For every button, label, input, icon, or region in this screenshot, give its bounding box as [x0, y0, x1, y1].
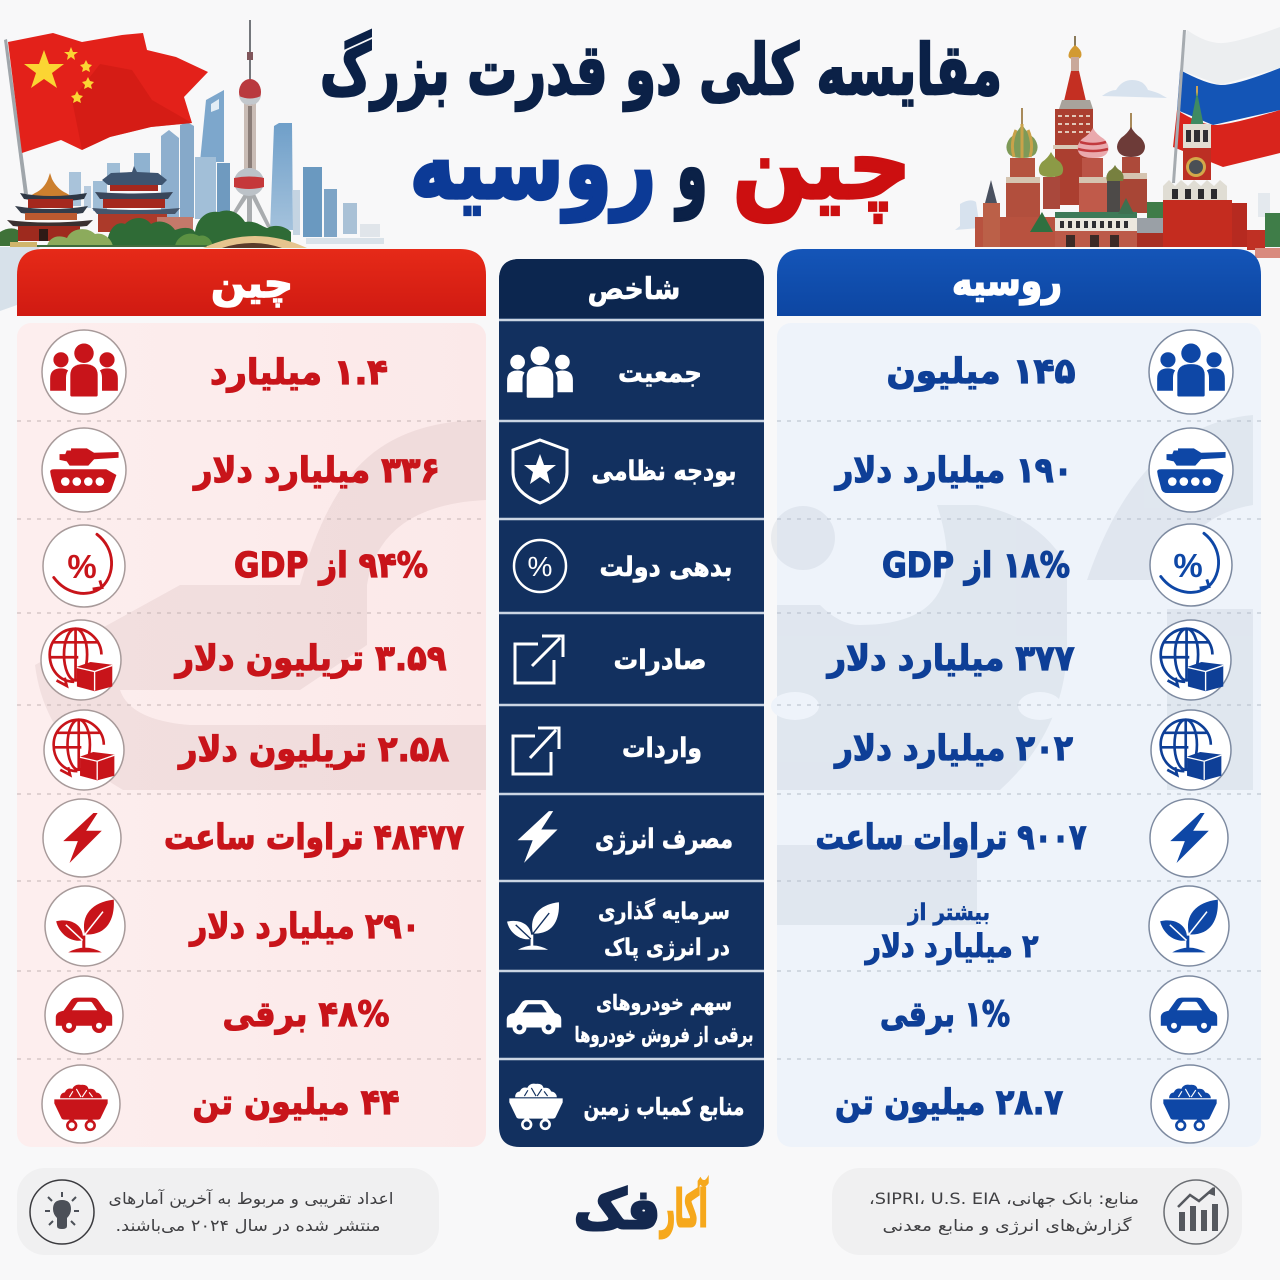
row: energy consumption [816, 799, 1228, 877]
logo: فک [574, 1178, 660, 1241]
icon: skyscrapers [69, 90, 380, 237]
indicator: exports: صادرات [614, 645, 706, 676]
indicator: energy consumption [518, 811, 733, 863]
logo [574, 1178, 708, 1241]
icon: growth chart [1164, 1180, 1228, 1244]
indicator: government debt: بدهی دولت [600, 552, 732, 583]
indicator: clean energy investment [507, 898, 730, 961]
Russia header [777, 249, 1261, 316]
row: energy consumption: ۹۰۰۷ تراوات ساعت [816, 818, 1086, 858]
indicator: clean energy investment: سرمایه گذاری [598, 898, 730, 925]
row: military budget: ۱۹۰ میلیارد دلار [834, 451, 1072, 491]
row: government debt: % [67, 548, 97, 585]
indicators background [499, 259, 764, 1147]
China header [17, 249, 486, 316]
icon: Russia flag [1173, 27, 1280, 167]
row: imports: ۲.۵۸ تریلیون دلار [177, 730, 449, 770]
title [320, 29, 1002, 223]
icon: St Basil cathedral [975, 36, 1163, 247]
indicator: military budget [513, 440, 736, 503]
sources text: منابع: بانک جهانی، SIPRI، U.S. EIA، [869, 1189, 1139, 1209]
row: government debt: %‏۱۸ از GDP [882, 546, 1070, 586]
title word: China: چین [732, 105, 912, 223]
icon: China flag [8, 33, 208, 153]
indicator: military budget: بودجه نظامی [592, 456, 736, 487]
row: clean energy investment: ۲۹۰ میلیارد دلار [188, 907, 420, 947]
icon: light bulb [30, 1180, 94, 1244]
indicator: rare earths: منابع کمیاب زمین [584, 1093, 744, 1121]
row: government debt: %‏۹۴ از GDP [234, 546, 428, 586]
icon: trees and bridge [0, 210, 384, 248]
indicator: government debt: % [528, 551, 552, 582]
icon: flag pole [4, 39, 28, 194]
title word: Russia: روسیه [410, 105, 656, 223]
row: clean energy investment: بیشتر از [907, 900, 990, 926]
indicator: population [507, 346, 702, 398]
row: clean energy investment [45, 886, 420, 966]
row: military budget [834, 428, 1233, 512]
indicators header: شاخص [588, 272, 680, 307]
row: rare earths [42, 1065, 400, 1143]
row: imports [833, 710, 1231, 790]
row: exports [41, 620, 446, 700]
row: rare earths [835, 1065, 1229, 1143]
row: EV share: %‏۴۸ برقی [223, 995, 390, 1035]
indicator: energy consumption: مصرف انرژی [595, 824, 733, 855]
illustration: China flag and Shanghai skyline [0, 20, 384, 311]
panel: Russia column [771, 249, 1261, 1147]
indicator: EV share: برقی از فروش خودروها [574, 1023, 754, 1047]
Russia header: روسیه [952, 259, 1062, 305]
panel background [17, 323, 486, 1147]
watermark shapes [771, 415, 1253, 925]
China header: چین [211, 261, 293, 307]
row: imports: ۲۰۲ میلیارد دلار [833, 729, 1073, 769]
row: energy consumption [43, 799, 464, 877]
watermark holes [771, 692, 1062, 720]
indicator: imports: واردات [622, 733, 702, 764]
icon: pagoda right [92, 166, 193, 232]
footnote: sources [832, 1168, 1242, 1255]
icon: flag pole [1172, 30, 1186, 183]
row: exports: ۳.۵۹ تریلیون دلار [174, 639, 447, 679]
indicator: rare earths [509, 1084, 744, 1129]
icon: pagoda left [7, 173, 93, 241]
row: exports: ۳۷۷ میلیارد دلار [826, 639, 1074, 679]
watermark shapes [35, 420, 486, 790]
indicator: exports [515, 636, 706, 683]
indicator: EV share: سهم خودروهای [596, 991, 732, 1015]
row: government debt [882, 524, 1232, 606]
row: population [42, 330, 388, 414]
row: population [886, 330, 1233, 414]
row: exports [826, 620, 1231, 700]
row: EV share: %‏۱ برقی [880, 995, 1010, 1035]
row: clean energy investment: ۲ میلیارد دلار [864, 927, 1039, 965]
row: military budget [42, 428, 440, 512]
indicator: population: جمعیت [618, 358, 702, 389]
row: rare earths: ۲۸.۷ میلیون تن [835, 1083, 1063, 1123]
panel: China column [17, 249, 486, 1147]
indicator: EV share [507, 991, 754, 1047]
row: population: ۱۴۵ میلیون [886, 352, 1076, 392]
row: EV share [880, 976, 1228, 1054]
footnote: data note: منتشر شده در سال ۲۰۲۴ می‌باشند. [116, 1216, 381, 1236]
row: clean energy investment [864, 886, 1229, 966]
row: EV share [45, 976, 390, 1054]
title line 1: مقایسه کلی دو قدرت بزرگ [320, 29, 1002, 111]
indicator: imports [513, 728, 702, 774]
row: military budget: ۳۳۶ میلیارد دلار [192, 451, 440, 491]
row: rare earths: ۴۴ میلیون تن [192, 1083, 400, 1123]
row: energy consumption: ۴۸۴۷۷ تراوات ساعت [164, 818, 464, 858]
icon: Oriental Pearl tower [230, 20, 271, 227]
row: government debt [43, 525, 428, 607]
icon: Spasskaya tower [1163, 86, 1280, 258]
icon: clouds [955, 80, 1270, 230]
row: population: ۱.۴ میلیارد [210, 353, 388, 393]
panel: indicators column [499, 259, 764, 1147]
indicator: clean energy investment: در انرژی پاک [604, 935, 730, 961]
logo: آکار [659, 1178, 708, 1238]
indicator: government debt [514, 540, 732, 592]
row: government debt: % [1173, 547, 1203, 584]
panel background [777, 323, 1261, 1147]
note text: اعداد تقریبی و مربوط به آخرین آمارهای [108, 1189, 394, 1209]
illustration: Russia flag and Kremlin [955, 27, 1280, 258]
footnote: sources: گزارش‌های انرژی و منابع معدنی [882, 1216, 1132, 1236]
row: imports [44, 710, 449, 790]
footnote: data note [17, 1168, 439, 1255]
title word: and: و [674, 113, 708, 221]
